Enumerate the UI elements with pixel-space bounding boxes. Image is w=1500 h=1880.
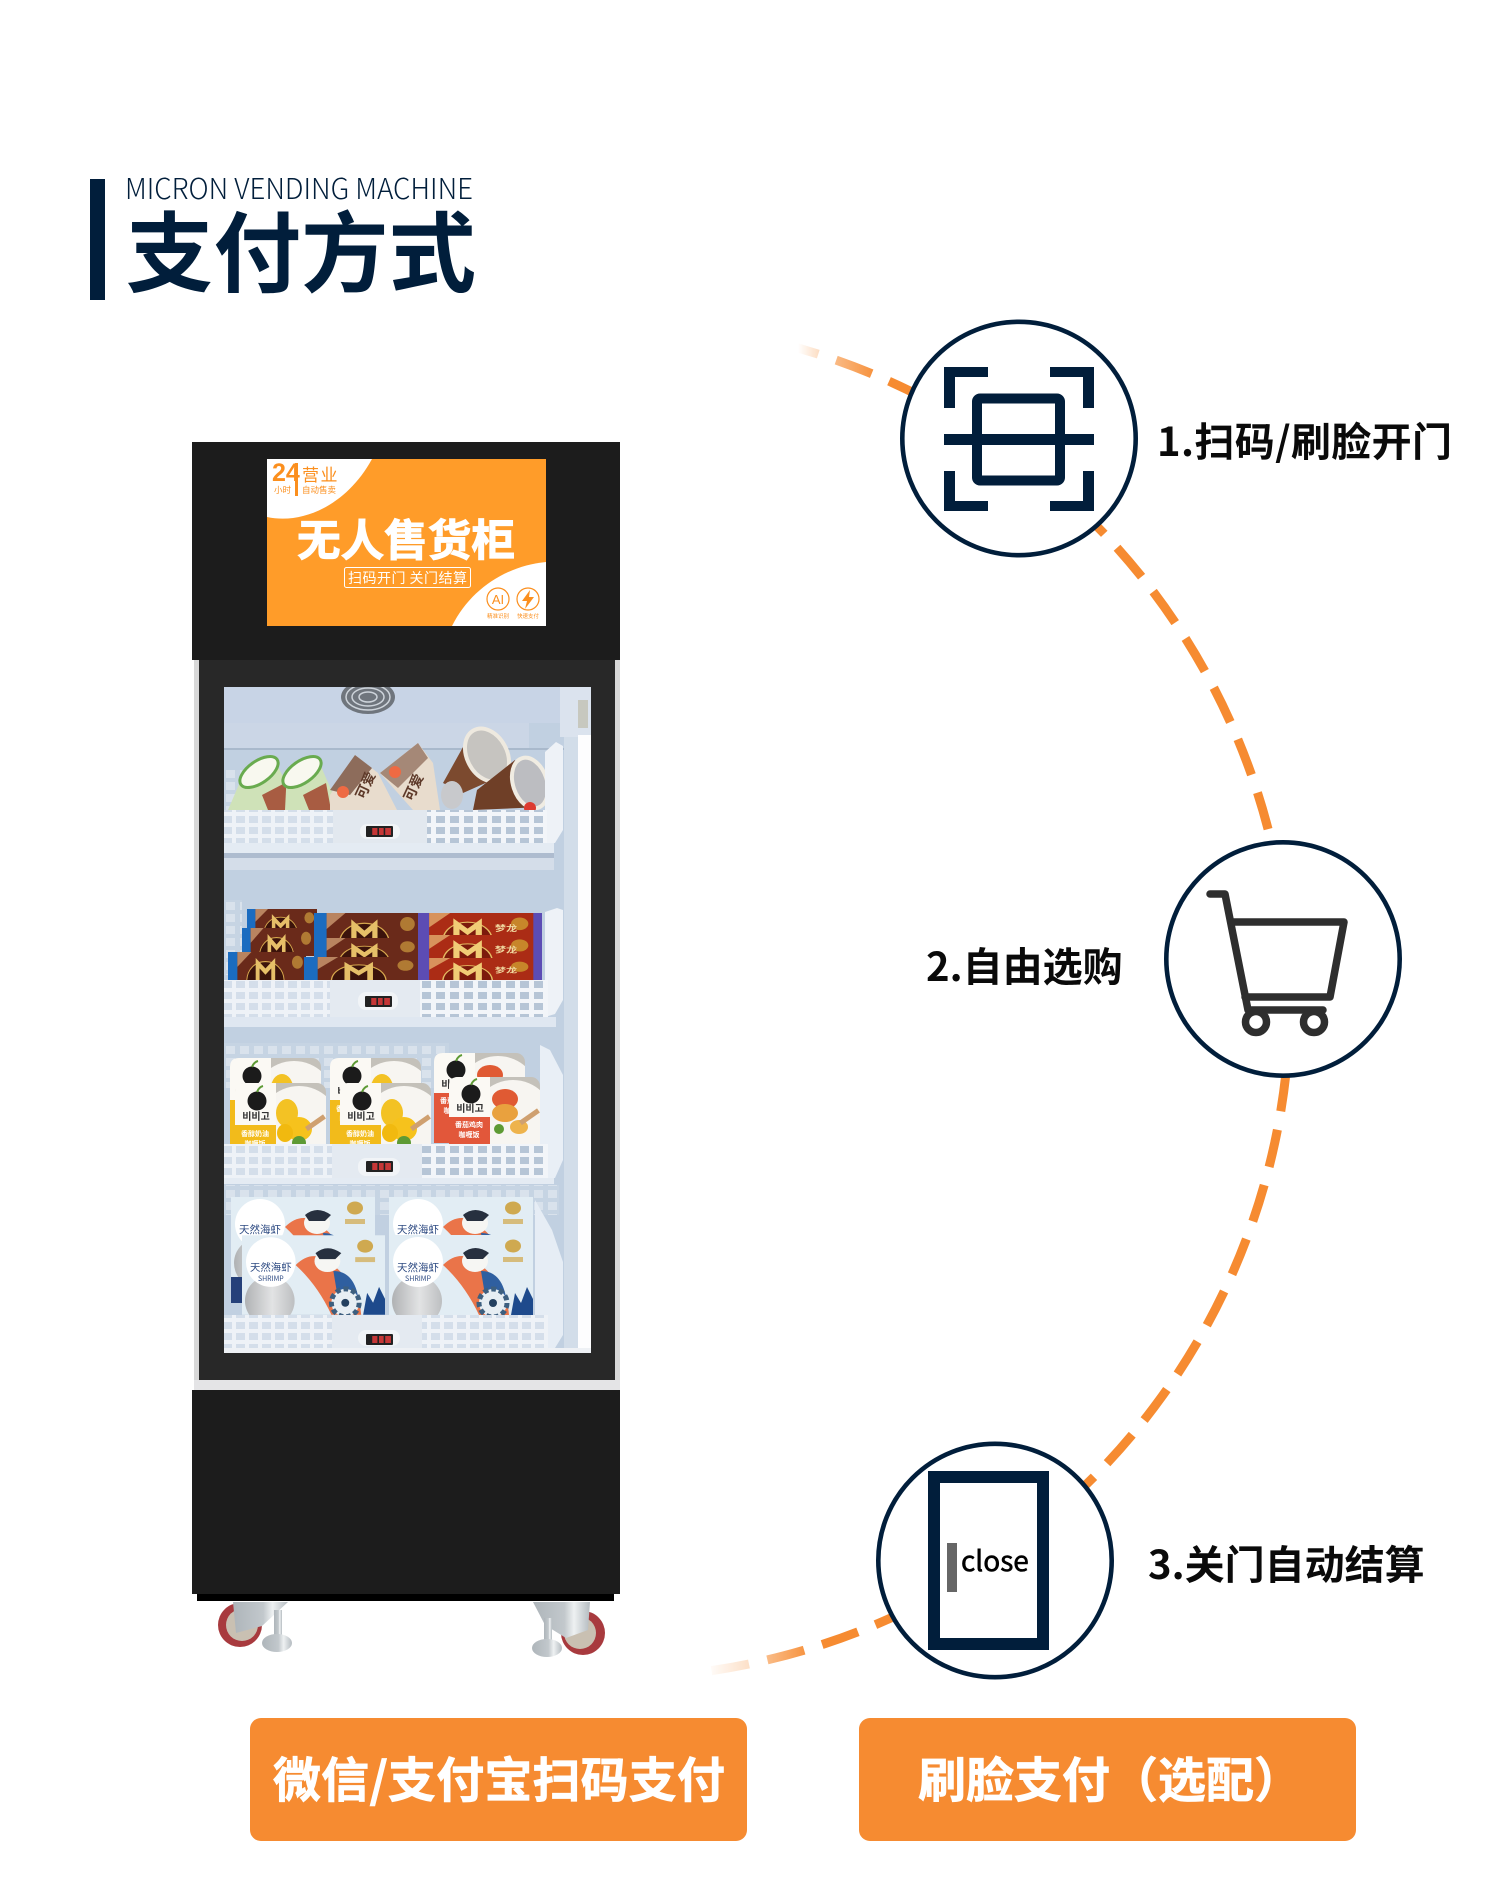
shelf 1: ice cream cones [224,721,563,870]
back meshes [224,1043,449,1088]
shelf 4: shrimp boxes [224,1197,591,1353]
dashed orange arc connecting the steps [671,344,1290,1675]
basket 2 [224,908,563,1027]
basket 4 [224,1200,591,1353]
shelf 1: ice cream cones: 可爱 [350,768,380,802]
shelf 1: ice cream cones: 可爱 [398,770,428,804]
icon: scan frame [944,367,1094,511]
advertising screen: 精准识别 [487,612,509,620]
refrigerated interior [224,680,591,1353]
advertising screen: 营业 [302,461,339,486]
icon: shopping cart [1210,894,1344,1032]
advertising screen: AI [492,592,504,607]
fan [224,680,591,714]
button: scan payment [250,1718,747,1841]
basket 1 [224,742,563,870]
shelf 2: chocolate bars [224,908,563,1027]
title accent bar [90,179,105,300]
top header panel [192,442,620,660]
step 3: closed door icon circle [878,1444,1112,1677]
advertising screen: 小时 [274,484,292,496]
step 2: cart icon circle [1166,842,1400,1076]
bottom cabinet panel [192,1390,620,1594]
chinese title: 支付方式 [126,184,476,311]
english subtitle: MICRON VENDING MACHINE [125,167,473,208]
advertising screen: 快速支付 [517,612,540,620]
step 1 label: 1.扫码/刷脸开门 [1157,410,1452,468]
left caster [218,1602,292,1652]
shelf 3: boxed curry meals [224,1045,563,1184]
base plate [197,1594,614,1601]
advertising screen [267,459,546,626]
advertising screen: 24 [272,459,300,487]
button: scan payment: 微信/支付宝扫码支付 [273,1741,725,1811]
step 1: scan icon circle [902,322,1136,555]
button: face payment [859,1718,1356,1841]
advertising screen: 扫码开门 关门结算 [348,568,467,588]
button: face payment: 刷脸支付（选配） [918,1741,1302,1811]
icon: door [934,1477,1043,1644]
advertising screen: 自动售卖 [302,484,337,496]
vending machine [192,442,620,1657]
advertising screen: 无人售货柜 [297,505,515,569]
door frame [194,660,620,1390]
icon: door: close [961,1540,1029,1580]
right caster [532,1602,605,1657]
step 2 label: 2.自由选购 [926,935,1123,993]
title block [90,167,476,311]
step 3 label: 3.关门自动结算 [1148,1533,1425,1591]
basket 3 [224,1045,563,1184]
